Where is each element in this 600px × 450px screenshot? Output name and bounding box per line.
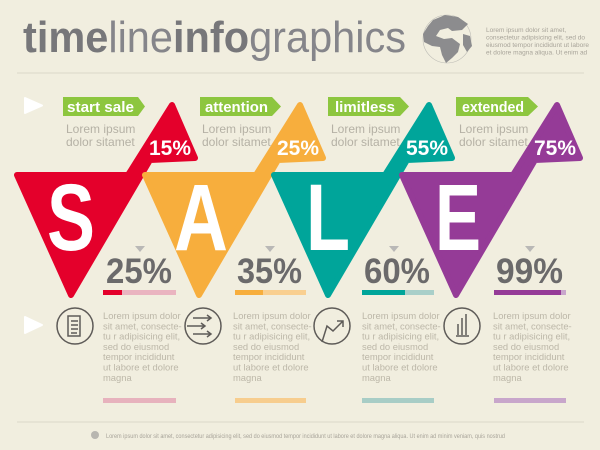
body texts: Lorem ipsum dolor	[233, 310, 311, 321]
shape: S red: S	[47, 165, 95, 271]
subtitle texts	[66, 122, 528, 149]
subtitle texts: dolor sitamet	[459, 135, 528, 149]
icon: document	[57, 308, 93, 344]
body texts: magna	[233, 372, 262, 383]
body texts: Lorem ipsum dolor	[362, 310, 440, 321]
body texts: magna	[362, 372, 391, 383]
body texts: tempor incididunt	[233, 351, 305, 362]
icon: play bottom	[25, 317, 42, 333]
body texts: sed do eiusmod	[493, 341, 559, 352]
percentages	[106, 252, 563, 291]
body texts	[103, 310, 572, 383]
icon: play top	[25, 98, 42, 113]
body texts: sit amet, consecte-	[103, 320, 182, 331]
icon: globe	[423, 15, 472, 63]
tag: extended: extended	[462, 99, 524, 116]
percentages: 99%	[496, 252, 563, 291]
body texts: ut labore et dolore	[233, 362, 309, 372]
subtitle texts: Lorem ipsum	[66, 122, 135, 136]
body texts: tu r adipisicing elit,	[362, 331, 439, 342]
title: timelineinfographics	[23, 13, 406, 62]
footer: Lorem ipsum dolor sit amet, consectetur adipisicing elit, sed do eiusmod tempor incididunt ut labore et dolore magna aliqua. Ut enim ad minim veniam, quis nostrud	[106, 433, 505, 440]
body texts: sit amet, consecte-	[362, 320, 441, 331]
subtitle texts: dolor sitamet	[66, 135, 135, 149]
progress bars	[103, 290, 566, 295]
tag: limitless	[328, 97, 409, 116]
body texts: magna	[103, 372, 132, 383]
markers	[135, 246, 535, 252]
shape: L teal: 55%	[406, 137, 448, 160]
tag: attention: attention	[205, 99, 268, 116]
shape: E purple: E	[435, 165, 481, 271]
shape: S red: 15%	[149, 137, 191, 160]
subtitle texts: Lorem ipsum	[459, 122, 528, 136]
subtitle texts: Lorem ipsum	[202, 122, 271, 136]
body texts: sed do eiusmod	[103, 341, 169, 352]
icon: arrows	[185, 308, 221, 344]
bottom bars	[103, 398, 566, 403]
shape: E purple: 75%	[534, 137, 576, 160]
body texts: tempor incididunt	[103, 351, 175, 362]
body texts: ut labore et dolore	[103, 362, 179, 372]
icon: bar chart	[444, 308, 480, 344]
body texts: sit amet, consecte-	[493, 320, 572, 331]
body texts: tu r adipisicing elit,	[233, 331, 310, 342]
shape: A orange	[145, 105, 323, 295]
shape: S red	[17, 105, 195, 295]
subtitle texts: dolor sitamet	[331, 135, 400, 149]
percentages: 35%	[237, 252, 302, 291]
tag: attention	[200, 97, 281, 116]
body texts: ut labore et dolore	[493, 362, 569, 372]
shape: A orange: A	[174, 165, 228, 271]
body texts: tempor incididunt	[493, 351, 565, 362]
percentages: 60%	[364, 252, 430, 291]
body texts: tempor incididunt	[362, 351, 434, 362]
body texts: tu r adipisicing elit,	[493, 331, 570, 342]
body texts: Lorem ipsum dolor	[493, 310, 571, 321]
header text: eiusmod tempor incididunt ut labore	[486, 42, 589, 49]
body texts: ut labore et dolore	[362, 362, 438, 372]
shape: A orange: 25%	[277, 137, 319, 160]
percentages: 25%	[106, 252, 172, 291]
shape: L teal	[274, 105, 452, 295]
tag: start sale: start sale	[67, 99, 134, 116]
header text: et dolore magna aliqua. Ut enim ad	[486, 50, 588, 56]
body texts: sed do eiusmod	[362, 341, 428, 352]
shape: L teal: L	[306, 165, 350, 271]
header text: Lorem ipsum dolor sit amet,	[486, 27, 566, 34]
header text: consectetur adipisicing elit, sed do	[486, 34, 585, 42]
body texts: Lorem ipsum dolor	[103, 310, 181, 321]
subtitle texts: Lorem ipsum	[331, 122, 400, 136]
icon: trend	[314, 308, 350, 344]
shape: E purple	[402, 105, 580, 295]
body texts: magna	[493, 372, 522, 383]
body texts: sed do eiusmod	[233, 341, 299, 352]
footer	[91, 431, 505, 440]
tag: limitless: limitless	[335, 99, 395, 116]
body texts: sit amet, consecte-	[233, 320, 312, 331]
body texts: tu r adipisicing elit,	[103, 331, 180, 342]
subtitle texts: dolor sitamet	[202, 135, 271, 149]
